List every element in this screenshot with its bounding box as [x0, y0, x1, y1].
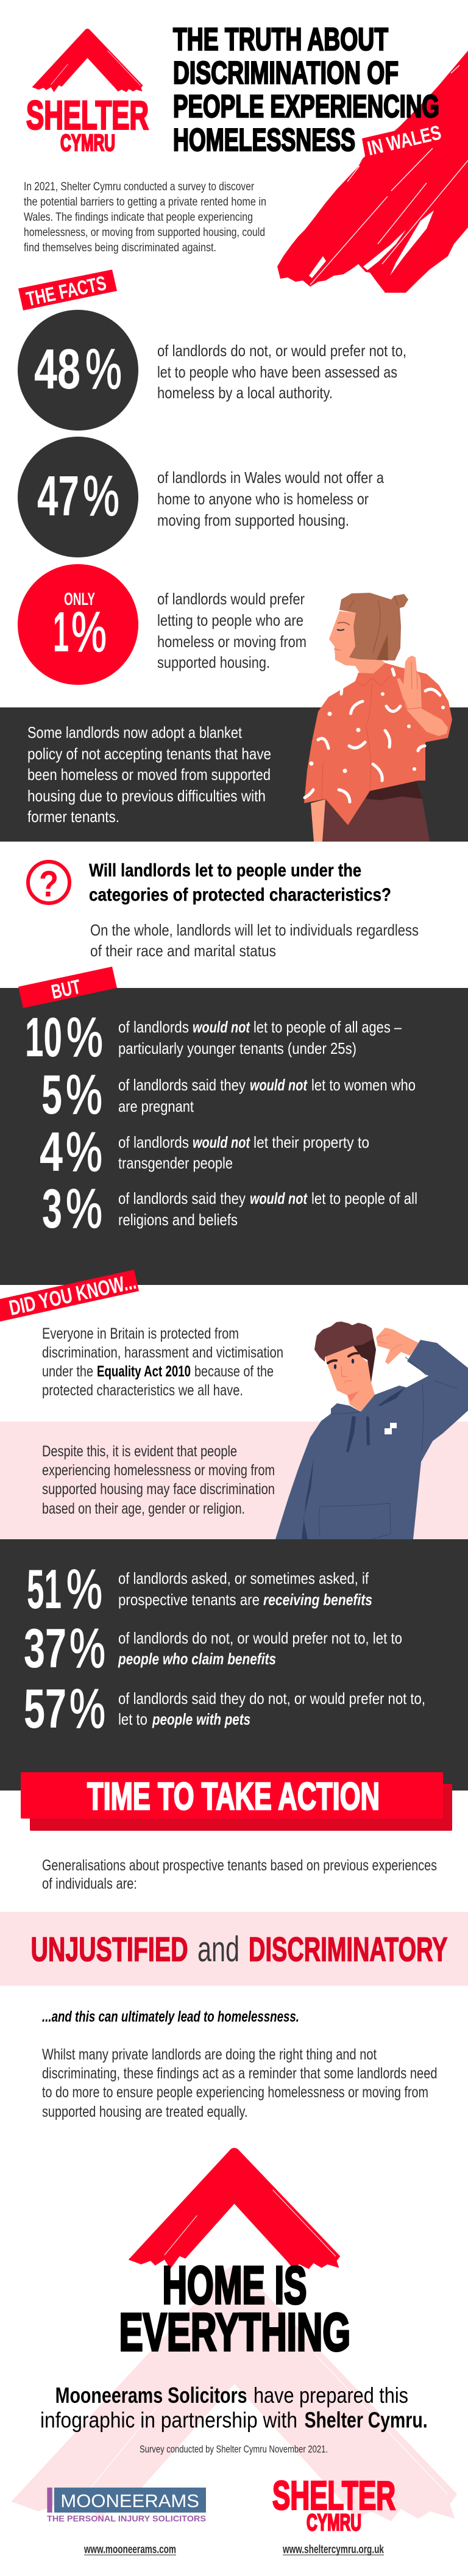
tag: but — [18, 967, 117, 1008]
link: mooneerams website: www.mooneerams.com — [83, 2544, 176, 2556]
text: partnership: infographic in partnership with — [40, 2407, 297, 2432]
tag: but: BUT — [49, 975, 82, 1003]
stat: 51%: 51 — [27, 1559, 62, 1620]
text: on the whole: of their race and marital status — [90, 942, 276, 960]
stat: 37%: % — [69, 1618, 105, 1680]
stat: 37% — [24, 1618, 402, 1680]
text: whilst many landlords: supported housing are treated equally. — [42, 2103, 247, 2120]
text: lead to homelessness: ...and this can ultimately lead to homelessness. — [42, 2008, 299, 2025]
stat: 48%: homeless by a local authority. — [157, 384, 333, 402]
panel: blanket policy: former tenants. — [27, 807, 119, 826]
panel: unjustified and discriminatory: UNJUSTIFIED — [30, 1930, 188, 1969]
stat: only 1%: ONLY — [64, 590, 95, 609]
stat: 10%: % — [66, 1007, 103, 1068]
icon: man thumbs down — [275, 1322, 468, 1539]
text: on the whole — [90, 921, 419, 960]
stat: 3%: would not — [250, 1189, 308, 1208]
stat: 10%: would not — [193, 1018, 250, 1036]
text: equality act: under the — [42, 1363, 93, 1380]
stat: 57%: let to — [118, 1710, 147, 1728]
roof: red — [129, 2148, 340, 2269]
stat: 51%: % — [66, 1559, 102, 1620]
banner: time to take action — [21, 1772, 452, 1831]
stat: 57%: % — [69, 1678, 105, 1740]
text: survey credit: Survey conducted by Shelter Cymru November 2021. — [140, 2443, 328, 2455]
stat: 3% — [42, 1178, 417, 1240]
logo: Mooneerams: THE PERSONAL INJURY SOLICITORS — [47, 2514, 206, 2524]
heading: home is everything: HOME IS — [162, 2256, 307, 2315]
text: equality act: Equality Act 2010 — [97, 1363, 191, 1380]
panel: but statistics — [0, 967, 468, 1285]
title: HOMELESSNESS — [173, 123, 355, 158]
stat: 4% — [40, 1122, 369, 1183]
stat: 4%: let their property to — [254, 1133, 369, 1151]
heading: home is everything — [119, 2256, 350, 2362]
text: whilst many landlords — [42, 2046, 438, 2120]
icon: question mark — [28, 862, 69, 904]
stat: 47%: home to anyone who is homeless or — [157, 490, 369, 508]
panel: blanket policy: policy of not accepting tenants that have — [27, 745, 271, 763]
stat: 5%: of landlords said they — [118, 1076, 246, 1094]
logo: Shelter Cymru: CYMRU — [60, 131, 115, 156]
brush stroke: red diagonal — [277, 51, 468, 293]
stat: 3%: let to people of all — [311, 1189, 417, 1208]
panel: blanket policy: Some landlords now adopt a blanket — [27, 723, 243, 742]
stat: 47%: of landlords in Wales would not offer a — [157, 468, 384, 487]
stat: 5%: would not — [250, 1076, 308, 1094]
logo: Shelter Cymru footer: CYMRU — [307, 2510, 361, 2536]
stat: 3%: of landlords said they — [118, 1189, 246, 1208]
text: equality act: Everyone in Britain is protected from — [42, 1325, 239, 1342]
text: generalisations — [42, 1857, 437, 1892]
tag: did you know: DID YOU KNOW... — [7, 1270, 138, 1320]
stat: only 1%: letting to people who are — [157, 611, 303, 629]
stat: only 1%: supported housing. — [157, 653, 270, 671]
stat: 51%: prospective tenants are — [118, 1590, 260, 1609]
stat: 10%: of landlords — [118, 1018, 189, 1036]
stat: 4%: 4 — [40, 1122, 63, 1183]
stat: 5%: 5 — [41, 1064, 62, 1126]
stat: 3%: 3 — [42, 1178, 62, 1240]
stat: 37%: people who claim benefits — [118, 1650, 276, 1668]
logo: Shelter Cymru footer — [272, 2472, 395, 2536]
stat: 5%: let to women who — [311, 1076, 416, 1094]
stat: 5%: are pregnant — [118, 1097, 194, 1115]
heading: protected characteristics: Will landlords let to people under the — [89, 860, 361, 881]
stat: 57%: 57 — [24, 1678, 66, 1740]
stat: only 1%: homeless or moving from — [157, 632, 307, 651]
tag: the facts: THE FACTS — [24, 271, 108, 310]
stat: 47%: moving from supported housing. — [157, 511, 349, 529]
stat: 10%: let to people of all ages – — [254, 1018, 402, 1036]
stat: 51% — [27, 1559, 372, 1620]
panel: despite this — [0, 1422, 468, 1539]
title: THE TRUTH ABOUT — [173, 22, 388, 57]
stat: only 1%: of landlords would prefer — [157, 590, 305, 608]
panel: despite this: Despite this, it is evident that people — [42, 1443, 237, 1460]
stat: 48% — [18, 310, 406, 431]
stat: only 1%: 1 — [53, 600, 69, 664]
stat: 4%: % — [66, 1122, 102, 1183]
stat: 37%: 37 — [24, 1618, 66, 1680]
stat: 10%: particularly younger tenants (under 25s) — [118, 1039, 356, 1057]
stat: 57% — [24, 1678, 425, 1740]
stat: 48%: 48 — [34, 337, 80, 401]
text: generalisations: of individuals are: — [42, 1875, 137, 1892]
text: on the whole: On the whole, landlords will let to individuals regardless — [90, 921, 419, 939]
icon: question mark: ? — [39, 864, 58, 904]
tag: in Wales — [362, 120, 445, 160]
intro text: Wales. The findings indicate that people experiencing — [24, 210, 253, 224]
link: shelter cymru website: www.sheltercymru.org.uk — [282, 2544, 384, 2556]
text: partnership — [40, 2383, 428, 2432]
panel: unjustified and discriminatory — [0, 1912, 468, 1986]
text: equality act: because of the — [194, 1363, 274, 1380]
panel: despite this: based on their age, gender or religion. — [42, 1500, 245, 1517]
stat: 4%: of landlords — [118, 1133, 189, 1151]
stat: 10%: 10 — [25, 1007, 62, 1068]
heading: protected characteristics: categories of protected characteristics? — [89, 885, 391, 905]
logo: Mooneerams: MOONEERAMS — [60, 2491, 199, 2511]
stat: 47%: 47 — [37, 464, 79, 528]
tag: the facts — [18, 270, 117, 310]
text: whilst many landlords: Whilst many private landlords are doing the right thing and not — [42, 2046, 377, 2063]
panel: despite this: experiencing homelessness or moving from — [42, 1462, 275, 1479]
stat: 48%: of landlords do not, or would prefer not to, — [157, 342, 406, 360]
intro text: find themselves being discriminated against. — [24, 241, 216, 254]
heading: home is everything: EVERYTHING — [119, 2303, 350, 2362]
roof: pale background — [12, 2266, 457, 2521]
text: partnership: Mooneerams Solicitors — [55, 2383, 247, 2408]
tag: did you know — [0, 1270, 139, 1322]
intro text: In 2021, Shelter Cymru conducted a survey to discover — [24, 180, 254, 193]
text: equality act: discrimination, harassment and victimisation — [42, 1344, 283, 1361]
panel: benefits and pets statistics — [0, 1539, 468, 1791]
stat: only 1%: % — [71, 600, 107, 664]
heading: protected characteristics — [89, 860, 391, 905]
stat: 3%: % — [66, 1178, 102, 1240]
intro text: the potential barriers to getting a private rented home in — [24, 195, 266, 209]
stat: 47%: % — [83, 464, 119, 528]
text: equality act — [42, 1325, 283, 1399]
stat: 10% — [25, 1007, 402, 1068]
panel: blanket policy: been homeless or moved from supported — [27, 765, 271, 784]
logo: Shelter Cymru — [26, 29, 149, 156]
panel: blanket policy — [0, 707, 468, 842]
text: partnership: Shelter Cymru. — [305, 2407, 428, 2432]
stat: 3%: religions and beliefs — [118, 1211, 238, 1229]
icon: woman raising hand — [304, 593, 452, 842]
stat: 47% — [18, 437, 384, 557]
intro text — [24, 180, 266, 254]
stat: 51%: of landlords asked, or sometimes asked, if — [118, 1569, 369, 1587]
logo: Shelter Cymru: SHELTER — [26, 93, 149, 138]
text: partnership: have prepared this — [254, 2383, 408, 2408]
panel: blanket policy: housing due to previous difficulties with — [27, 787, 266, 805]
stat: 4%: would not — [193, 1133, 250, 1151]
stat: 37%: of landlords do not, or would prefer not to, let to — [118, 1629, 402, 1647]
stat: 48%: let to people who have been assessed as — [157, 363, 397, 381]
text: equality act: protected characteristics we all have. — [42, 1382, 243, 1399]
stat: 51%: receiving benefits — [263, 1590, 372, 1609]
stat: 5% — [41, 1064, 416, 1126]
title — [173, 22, 439, 158]
panel: despite this: supported housing may face discrimination — [42, 1481, 275, 1498]
stat: 5%: % — [66, 1064, 102, 1126]
stat: only 1% — [18, 564, 307, 685]
intro text: homelessness, or moving from supported housing, could — [24, 226, 265, 239]
stat: 48%: % — [85, 337, 122, 401]
panel: unjustified and discriminatory: and — [197, 1930, 239, 1969]
logo: Mooneerams — [47, 2488, 206, 2524]
tag: in Wales: IN WALES — [365, 121, 443, 160]
stat: 57%: people with pets — [152, 1710, 250, 1728]
logo: Shelter Cymru footer: SHELTER — [272, 2472, 395, 2517]
stat: 4%: transgender people — [118, 1154, 233, 1172]
